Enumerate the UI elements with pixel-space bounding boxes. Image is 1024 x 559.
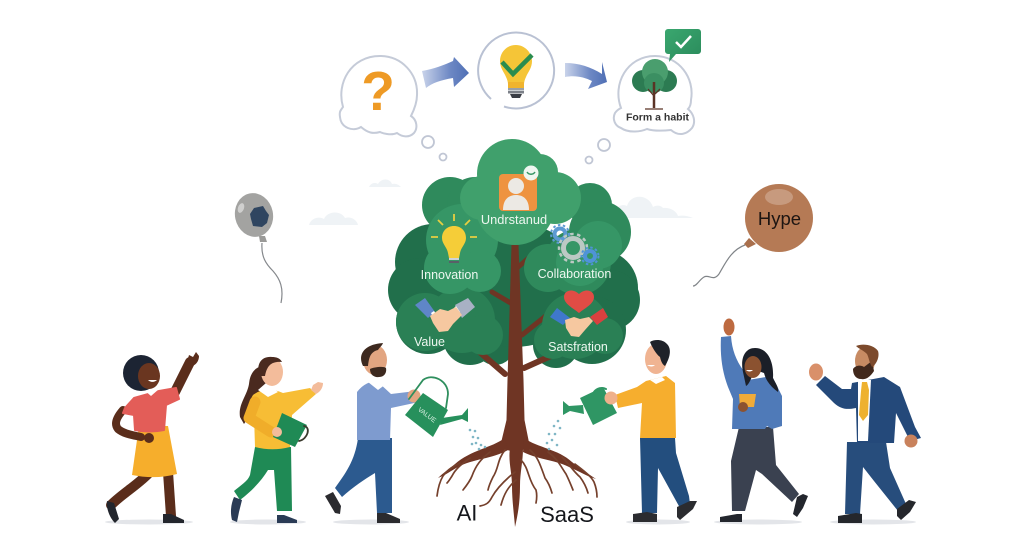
label: understand: Undrstanud [481, 212, 547, 227]
water drops right [546, 420, 561, 450]
label: hype: Hype [758, 208, 801, 229]
label: AI: AI [457, 500, 477, 526]
person: bearded man watering [325, 343, 468, 523]
branch: value [414, 298, 475, 349]
label: SaaS: SaaS [540, 502, 594, 527]
icon: question mark: ? [361, 60, 395, 122]
label: value on can: VALUE [416, 406, 438, 425]
deflated grey balloon [231, 190, 282, 303]
thought bubble: form a habit [614, 56, 694, 134]
person: woman in red top and yellow skirt [107, 352, 199, 523]
thought bubble: idea [478, 32, 554, 108]
label: satisfaction: Satsfration [548, 340, 608, 354]
label: value: Value [414, 335, 445, 349]
branch: satisfaction [548, 290, 608, 354]
branches [475, 250, 553, 374]
branch: collaboration [538, 225, 611, 281]
icon: person card [499, 166, 538, 211]
label: form a habit: Form a habit [626, 112, 690, 124]
dark foliage [388, 223, 640, 368]
trunk and roots [437, 245, 597, 527]
water drops left [469, 429, 486, 450]
hype balloon [693, 184, 813, 286]
ground shadows [105, 520, 916, 524]
tree canopy [388, 139, 640, 374]
top foliage [460, 139, 581, 245]
thought dots [422, 136, 610, 164]
icon: gears [551, 225, 598, 264]
label: collaboration: Collaboration [538, 267, 611, 281]
icon: handshake [415, 298, 475, 332]
background clouds [309, 180, 693, 225]
label: innovation: Innovation [421, 268, 478, 282]
branch: understand [481, 166, 547, 227]
thought bubble: question [340, 56, 417, 136]
icon: light bulb with check [500, 45, 532, 98]
icon: small tree [632, 59, 677, 109]
person: woman in blue with raised arm [720, 318, 808, 522]
icon: heart and handshake [550, 290, 608, 337]
icon: bulb [431, 214, 477, 263]
middle foliage [422, 177, 631, 295]
badge: green check [665, 29, 701, 62]
person: man in suit with tie [809, 345, 921, 523]
person: man in yellow sweater watering [563, 340, 697, 522]
arrow: idea to habit [565, 62, 607, 89]
branch: innovation [421, 214, 478, 282]
arrow: question to idea [422, 57, 469, 88]
person: woman in yellow top with cup [231, 357, 323, 523]
lower foliage [396, 287, 623, 359]
